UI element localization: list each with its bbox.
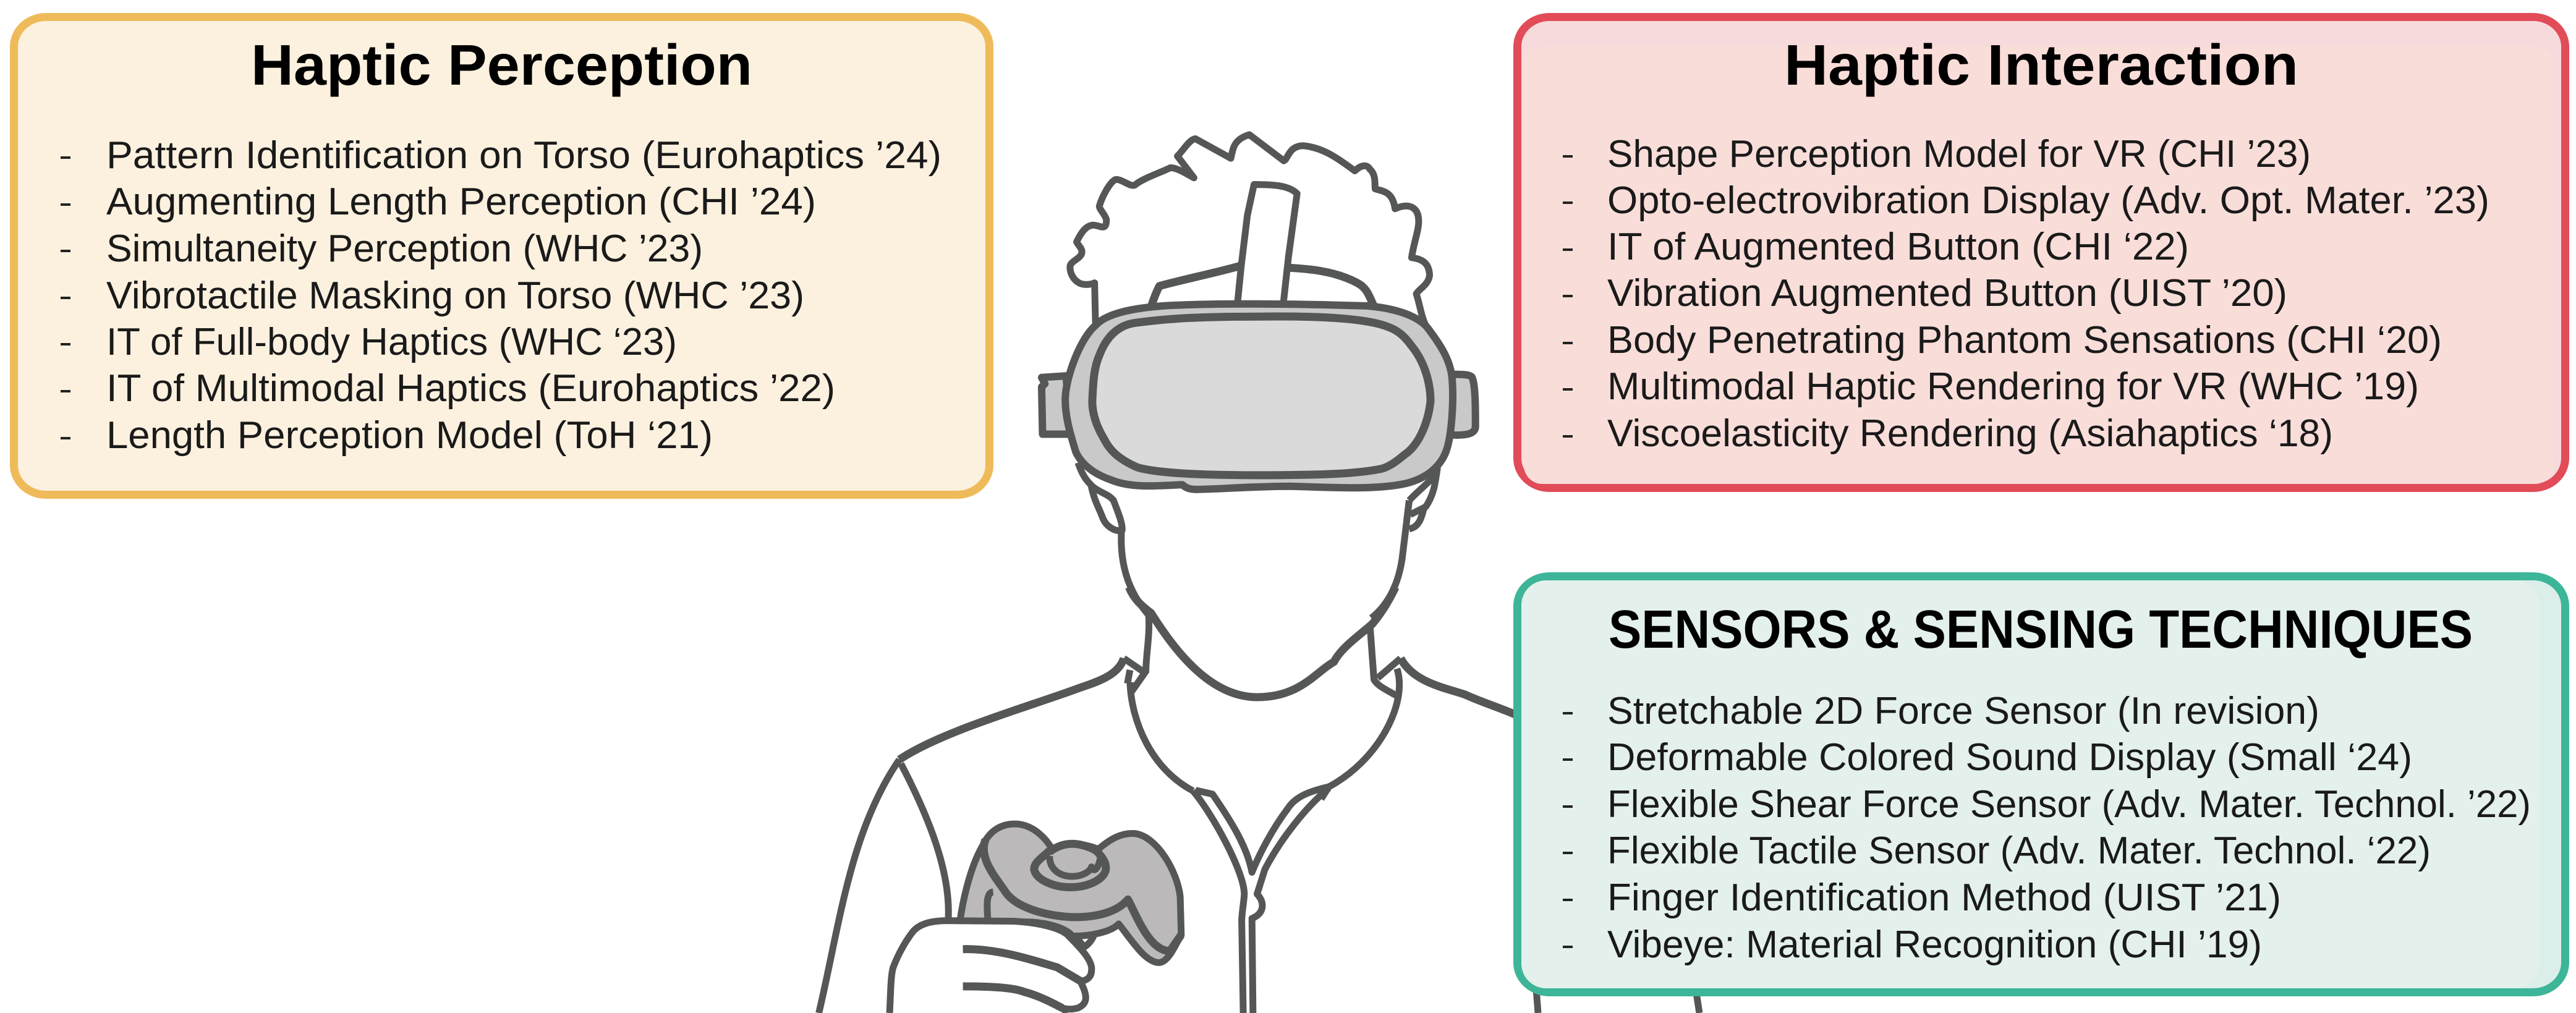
publication list: Vibration Augmented Button (UIST ’20) xyxy=(1607,272,2287,315)
jaw xyxy=(1129,587,1395,697)
right shoulder xyxy=(1401,658,1516,715)
heading: Haptic Perception xyxy=(251,33,752,97)
right side strap xyxy=(1450,375,1476,435)
controller grip contour xyxy=(984,840,1181,951)
controller thumbstick xyxy=(1050,856,1101,876)
publication list: Body Penetrating Phantom Sensations (CHI ‘20) xyxy=(1607,319,2442,362)
panel inner tint xyxy=(1524,46,2553,484)
sleeve seam xyxy=(901,764,948,923)
panel inner tint xyxy=(1521,580,2540,988)
publication list: Simultaneity Perception (WHC ’23) xyxy=(106,227,703,270)
publication list: IT of Multimodal Haptics (Eurohaptics ’22) xyxy=(106,367,835,410)
publication list: Vibeye: Material Recognition (CHI ’19) xyxy=(1607,923,2262,966)
publication list: Augmenting Length Perception (CHI ’24) xyxy=(106,180,816,223)
left arm xyxy=(819,760,899,1013)
finger lines xyxy=(963,949,1080,1008)
publication list: Multimodal Haptic Rendering for VR (WHC ’19) xyxy=(1607,365,2419,408)
left ear xyxy=(1078,462,1122,531)
controller thumbstick ring xyxy=(1034,844,1106,888)
left side strap xyxy=(1042,376,1069,434)
publication list: Opto-electrovibration Display (Adv. Opt. Mater. ’23) xyxy=(1607,179,2489,222)
right arm lines below the sensors panel xyxy=(1536,989,1699,1013)
headset screen xyxy=(1092,316,1430,475)
face sides xyxy=(1121,501,1409,618)
publication list: Flexible Shear Force Sensor (Adv. Mater. Technol. ’22) xyxy=(1607,783,2531,826)
centre strap xyxy=(1238,184,1297,303)
controller small wedge xyxy=(1075,935,1094,947)
neck xyxy=(1131,613,1399,697)
controller trigger line xyxy=(987,892,993,923)
jacket left front xyxy=(1193,791,1244,1013)
neck, torso, controller and hand xyxy=(819,587,1516,1013)
panel: haptic perception xyxy=(14,17,989,494)
head band xyxy=(1151,266,1241,306)
publication list: IT of Augmented Button (CHI ‘22) xyxy=(1607,226,2189,268)
panel frame xyxy=(1517,17,2565,488)
publication list: Stretchable 2D Force Sensor (In revision) xyxy=(1607,690,2319,732)
hand xyxy=(890,921,1092,1013)
heading: Haptic Interaction xyxy=(1784,33,2298,97)
publication list: Pattern Identification on Torso (Eurohaptics ’24) xyxy=(106,134,942,177)
publication list: Viscoelasticity Rendering (Asiahaptics ‘18) xyxy=(1607,412,2333,455)
figure: person wearing VR headset holding a controller xyxy=(819,135,1699,1013)
publication list xyxy=(1563,690,2531,966)
panel frame xyxy=(14,17,989,494)
right ear xyxy=(1407,467,1438,529)
collar xyxy=(1124,658,1401,791)
hair outline xyxy=(1070,135,1429,326)
controller body xyxy=(960,824,1181,963)
hair, strap and headset xyxy=(1042,135,1476,618)
panel: haptic interaction xyxy=(1517,17,2565,488)
panel: sensors and sensing techniques xyxy=(1517,576,2565,993)
heading: SENSORS & SENSING TECHNIQUES xyxy=(1609,600,2473,659)
publication list: Vibrotactile Masking on Torso (WHC ’23) xyxy=(106,274,804,317)
left shoulder xyxy=(899,658,1124,760)
publication list: Length Perception Model (ToH ‘21) xyxy=(106,414,713,457)
publication list: Finger Identification Method (UIST ’21) xyxy=(1607,876,2281,919)
jacket lapels and zip xyxy=(1196,787,1329,1013)
head band right xyxy=(1288,268,1374,306)
headset shell xyxy=(1065,304,1453,490)
publication list xyxy=(61,134,942,457)
publication list: IT of Full-body Haptics (WHC ‘23) xyxy=(106,321,677,363)
panel frame xyxy=(1517,576,2565,993)
publication list: Deformable Colored Sound Display (Small ‘24) xyxy=(1607,736,2412,779)
publication list xyxy=(1563,133,2489,455)
publication list: Shape Perception Model for VR (CHI ’23) xyxy=(1607,133,2311,176)
publication list: Flexible Tactile Sensor (Adv. Mater. Technol. ‘22) xyxy=(1607,829,2431,872)
